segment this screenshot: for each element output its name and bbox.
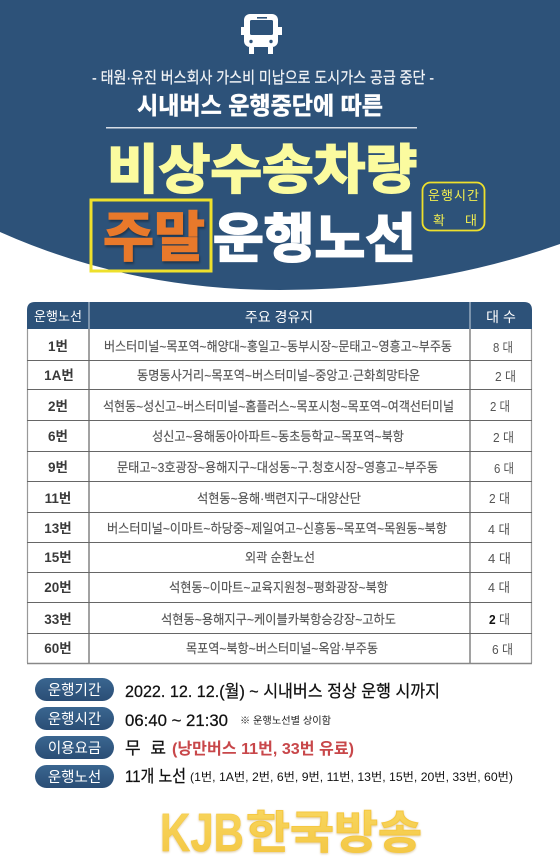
highlighted box: weekend <box>91 200 211 271</box>
table grid <box>27 302 532 664</box>
heading line: 시내버스 운행중단에 따른 <box>137 93 383 120</box>
info: fare: 무 료 <box>125 739 166 758</box>
info: routes: (1번, 1A번, 2번, 6번, 9번, 11번, 13번, 15번, 20번, 33번, 60번) <box>190 770 513 784</box>
info: operating hours <box>35 707 331 730</box>
info: operating hours: ※ 운행노선별 상이함 <box>240 715 331 727</box>
callout: extended hours: 운행시간 <box>428 188 479 203</box>
info: fare: (낭만버스 11번, 33번 유료) <box>172 740 354 758</box>
row: 6: 6번 <box>48 429 68 444</box>
info list <box>35 678 513 788</box>
info: operating period: 운행기간 <box>48 682 101 699</box>
row: 9: 문태고~3호광장~용해지구~대성동~구.청호시장~영흥고~부주동 <box>117 460 438 475</box>
row: 15 <box>44 550 511 566</box>
info: routes: 운행노선 <box>48 769 101 786</box>
row: 6 <box>48 429 514 445</box>
row: 1A: 1A번 <box>44 368 74 383</box>
row: 33: 33번 <box>44 612 72 627</box>
table header: 운행노선 <box>34 309 82 324</box>
table header: 대 수 <box>486 309 516 325</box>
row: 15: 4 대 <box>488 551 511 566</box>
row: 1A: 동명동사거리~목포역~버스터미널~중앙고·근화희망타운 <box>137 368 420 383</box>
row: 2: 2번 <box>48 399 68 414</box>
table header: 주요 경유지 <box>245 309 313 325</box>
row: 15: 외곽 순환노선 <box>245 550 315 565</box>
row: 60: 목포역~북항~버스터미널~옥암·부주동 <box>186 641 378 656</box>
logo: KJB: 한국방송 <box>246 807 422 858</box>
row: 13: 4 대 <box>488 522 510 537</box>
row: 20: 석현동~이마트~교육지원청~평화광장~북항 <box>169 580 388 595</box>
title: operating routes: 운행노선 <box>213 210 416 269</box>
row: 9: 9번 <box>48 460 68 475</box>
info: operating hours: 운행시간 <box>48 711 101 728</box>
title rule <box>106 127 417 128</box>
row: 33: 2 대 <box>489 612 510 627</box>
row: 2: 2 대 <box>490 399 510 414</box>
row: 33: 석현동~용해지구~케이블카북항승강장~고하도 <box>161 612 396 627</box>
row: 60: 60번 <box>44 641 72 656</box>
row: 20: 4 대 <box>488 580 510 595</box>
row: 1: 버스터미널~목포역~해양대~홍일고~동부시장~문태고~영흥고~부주동 <box>104 339 452 354</box>
callout: extended hours: 확 대 <box>433 213 477 228</box>
row: 11: 석현동~용해·백련지구~대양산단 <box>197 491 361 506</box>
banner background <box>0 0 560 290</box>
callout: extended hours <box>422 182 484 230</box>
row: 9: 6 대 <box>494 461 514 476</box>
row: 20 <box>44 580 510 595</box>
logo: KJB <box>160 803 422 861</box>
icon: bus <box>241 14 282 54</box>
row: 60: 6 대 <box>492 642 513 657</box>
row: 1A: 2 대 <box>495 369 516 384</box>
row: 11: 2 대 <box>489 491 510 506</box>
row: 2: 석현동~성신고~버스터미널~홈플러스~목포시청~목포역~여객선터미널 <box>103 399 454 414</box>
row: 13: 버스터미널~이마트~하당중~제일여고~신흥동~목포역~목원동~북항 <box>107 521 447 536</box>
row: 60 <box>44 641 513 657</box>
title: emergency vehicles: 비상수송차량 <box>107 141 417 200</box>
info: operating hours: 06:40 ~ 21:30 <box>125 711 228 730</box>
info: operating period <box>35 678 440 701</box>
row: 11 <box>45 491 510 506</box>
route table <box>27 302 532 664</box>
row: 13: 13번 <box>44 521 72 536</box>
row: 1A <box>44 368 516 384</box>
row: 11: 11번 <box>45 491 71 506</box>
info: fare <box>35 736 354 759</box>
row: 20: 20번 <box>44 580 72 595</box>
row: 33 <box>44 612 510 627</box>
row: 15: 15번 <box>44 550 72 565</box>
row: 1: 8 대 <box>493 340 513 355</box>
row: 6: 성신고~용해동아아파트~동초등학교~목포역~북항 <box>152 429 404 444</box>
row: 6: 2 대 <box>493 430 514 445</box>
highlighted box: weekend: 주말 <box>103 208 205 268</box>
info: fare: 이용요금 <box>48 740 101 757</box>
row: 9 <box>48 460 514 476</box>
subtitle: - 태원·유진 버스회사 가스비 미납으로 도시가스 공급 중단 - <box>92 69 434 87</box>
table header <box>27 302 532 329</box>
row: 1: 1번 <box>48 339 68 354</box>
info: routes <box>35 765 513 788</box>
info: operating period: 2022. 12. 12.(월) ~ 시내버스 정상 운행 시까지 <box>125 682 440 701</box>
header banner <box>0 0 560 290</box>
info: routes: 11개 노선 <box>125 767 186 786</box>
